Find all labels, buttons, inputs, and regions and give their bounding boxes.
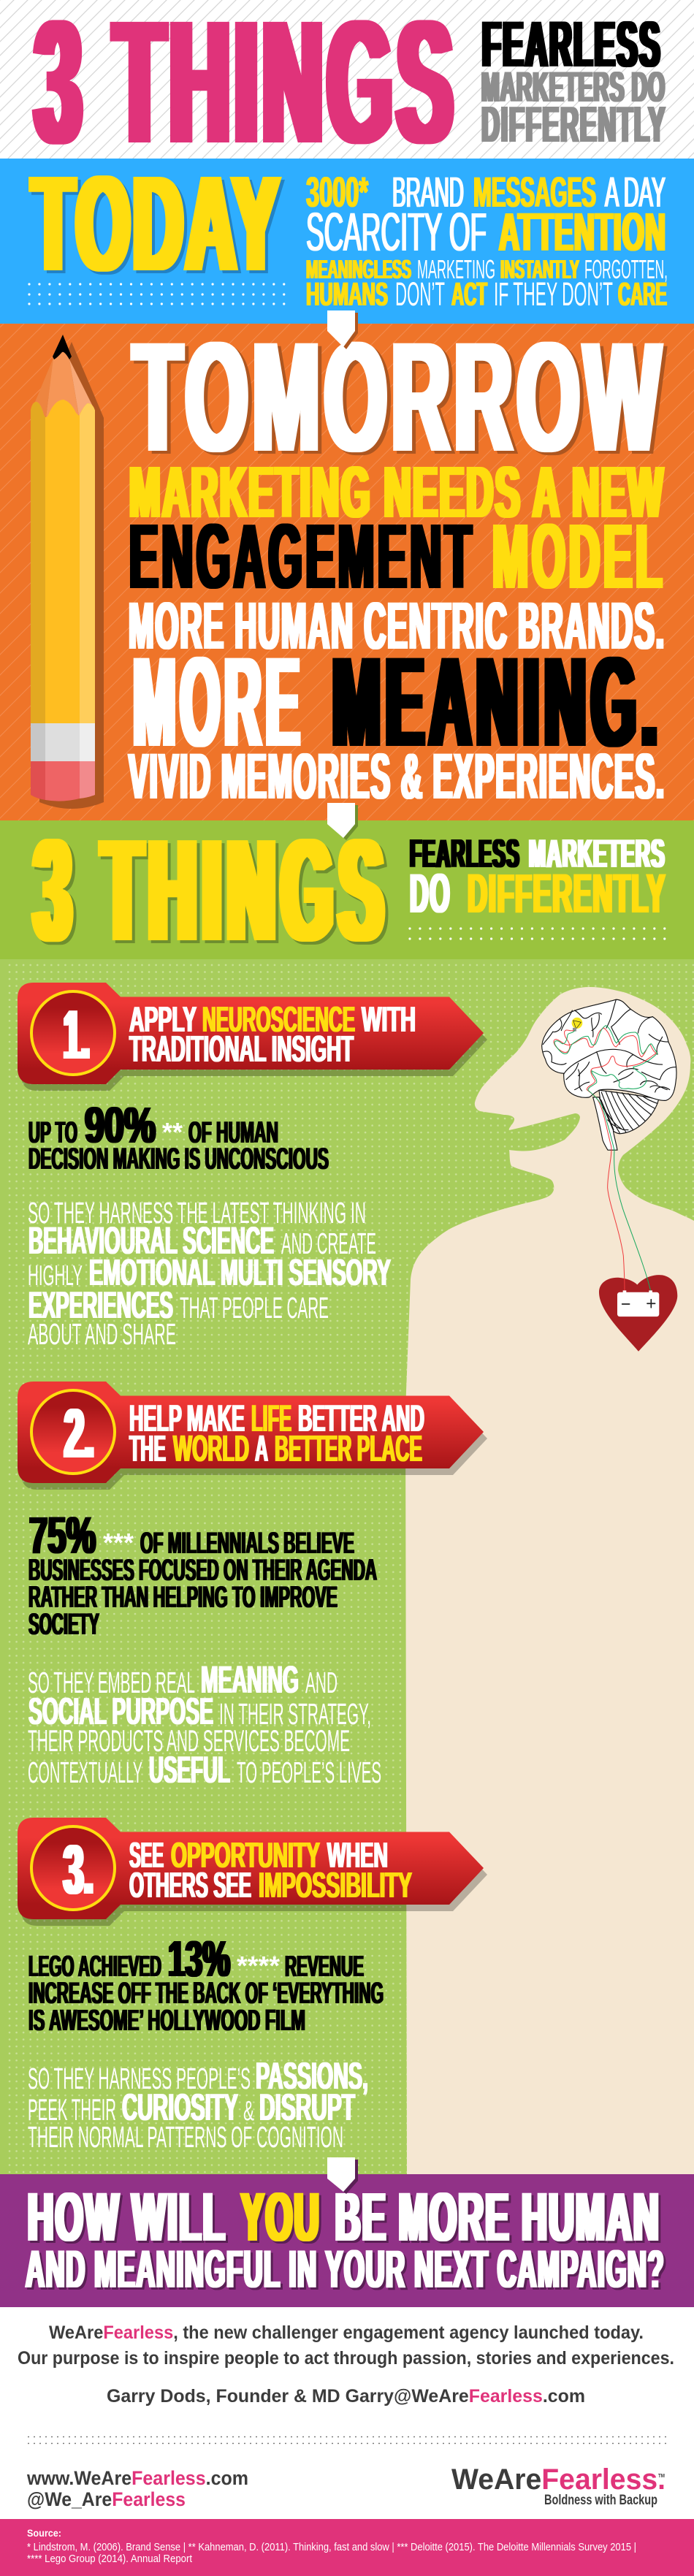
stat: 13 percent: REVENUE — [285, 1949, 364, 1983]
panel: today — [0, 148, 694, 324]
wire: red — [554, 1028, 656, 1291]
stat: 90 percent: 90% — [85, 1097, 156, 1154]
icon: light bulb — [572, 1018, 582, 1032]
panel: body background — [0, 959, 694, 2174]
stat: 13 percent: INCREASE OFF THE BACK OF ‘EVERYTHING — [28, 1975, 384, 2010]
text: scarcity of attention: SCARCITY OF — [306, 202, 487, 262]
text: behavioural science: EMOTIONAL MULTI SENSORY — [89, 1251, 391, 1293]
logo: Boldness with Backup — [544, 2493, 657, 2508]
figure: human silhouette — [405, 987, 694, 2174]
text: passions curiosity disrupt: & — [243, 2096, 254, 2127]
text: behavioural science: EXPERIENCES — [28, 1284, 173, 1327]
stat: 75 percent: OF MILLENNIALS BELIEVE — [140, 1525, 354, 1560]
icon: pencil — [31, 335, 104, 809]
stat: 75 percent: SOCIETY — [28, 1607, 99, 1641]
ribbon 1: APPLY — [129, 1000, 197, 1040]
text: meaningless marketing — [306, 254, 668, 284]
logo: TM — [658, 2474, 665, 2479]
ribbon 2: BETTER PLACE — [275, 1428, 422, 1469]
text: meaningless marketing: MEANINGLESS — [306, 254, 411, 284]
panel: three things banner — [0, 809, 694, 972]
ribbon 3: SEE — [129, 1836, 164, 1875]
text: behavioural science: AND CREATE — [281, 1227, 376, 1260]
text: behavioural science: HIGHLY — [28, 1260, 83, 1292]
panel: step 1 — [18, 983, 487, 1351]
text: meaningless marketing: INSTANTLY — [500, 254, 579, 284]
ribbon 3: IMPOSSIBILITY — [259, 1866, 412, 1905]
text: agency intro: WeAreFearless, the new challenger engagement agency launched today. — [49, 2322, 644, 2343]
ribbon 1: TRADITIONAL INSIGHT — [129, 1028, 354, 1070]
heading: how will you — [28, 2179, 660, 2256]
text: meaningless marketing: MARKETING — [417, 254, 495, 284]
text: source heading: Source: — [27, 2527, 61, 2539]
text: humans don't act: DON’T — [395, 275, 445, 313]
text: social purpose: SOCIAL PURPOSE — [28, 1691, 213, 1733]
ribbon 2: THE — [129, 1428, 166, 1469]
text: website: www.WeAreFearless.com — [26, 2467, 248, 2489]
ribbon 2: WORLD — [173, 1428, 249, 1469]
ribbon 2: HELP MAKE — [129, 1398, 245, 1440]
text: brand messages: 3000* — [306, 169, 368, 216]
text: social purpose: AND — [305, 1666, 338, 1699]
heading: how will you: YOU — [241, 2179, 321, 2256]
ribbon 2: BETTER AND — [298, 1398, 424, 1440]
text: social purpose: IN THEIR STRATEGY, — [219, 1697, 371, 1731]
stat: 75 percent: BUSINESSES FOCUSED ON THEIR AGENDA — [28, 1552, 377, 1587]
heading: how will you: HOW WILL — [28, 2179, 226, 2256]
text: passions curiosity disrupt: THEIR NORMAL PATTERNS OF COGNITION — [28, 2120, 343, 2154]
stat: 90 percent: DECISION MAKING IS UNCONSCIOUS — [28, 1141, 329, 1175]
stat: 13 percent — [28, 1930, 384, 2037]
text: social purpose: TO PEOPLE’S LIVES — [237, 1756, 381, 1789]
panel: call to action — [0, 2174, 694, 2307]
ribbon 1: 1. — [64, 996, 90, 1074]
text: social purpose: SO THEY EMBED REAL — [28, 1666, 195, 1699]
text: behavioural science — [28, 1196, 391, 1351]
panel: header — [0, 0, 694, 180]
ribbon 3: OTHERS SEE — [129, 1866, 251, 1905]
logo: WeAreFearless. — [451, 2463, 666, 2496]
stat: 75 percent: 75% — [29, 1507, 96, 1565]
stat: 75 percent: RATHER THAN HELPING TO IMPROVE — [28, 1579, 338, 1614]
ribbon 3: OPPORTUNITY — [171, 1836, 320, 1875]
ribbon 2: LIFE — [251, 1398, 291, 1440]
panel: step 2 — [18, 1382, 487, 1791]
ribbon 2: 2. — [64, 1395, 94, 1473]
text: passions curiosity disrupt: CURIOSITY — [122, 2087, 238, 2129]
text: brand messages — [306, 169, 666, 216]
illustration: brain wired to a heart battery — [542, 999, 677, 1352]
text: social purpose: USEFUL — [149, 1749, 230, 1791]
text: social purpose: THEIR PRODUCTS AND SERVICES BECOME — [28, 1723, 350, 1758]
arrow: today to tomorrow — [327, 310, 358, 349]
text: references line 2: **** Lego Group (2014). Annual Report — [27, 2553, 193, 2565]
panel: three things banner: DO — [410, 863, 451, 925]
ribbon 2: A — [255, 1428, 268, 1469]
icon: heart — [599, 1275, 677, 1352]
text: humans don't act — [306, 275, 667, 313]
ribbon 2 — [18, 1382, 487, 1490]
stat: 90 percent: ** — [162, 1117, 183, 1147]
text: social purpose: CONTEXTUALLY — [28, 1756, 142, 1789]
ribbon 3 — [18, 1818, 487, 1926]
text: passions curiosity disrupt: DISRUPT — [259, 2087, 355, 2129]
ribbon 1: WITH — [362, 1000, 416, 1040]
text: brand messages: BRAND — [392, 169, 464, 216]
text: humans don't act: ACT — [451, 275, 487, 313]
panel: step 3 — [18, 1818, 487, 2154]
text: social purpose — [28, 1658, 381, 1791]
text: passions curiosity disrupt: PASSIONS, — [256, 2055, 368, 2097]
stat: 13 percent: IS AWESOME’ HOLLYWOOD FILM — [28, 2003, 305, 2037]
stat: 13 percent: LEGO ACHIEVED — [28, 1949, 161, 1983]
stat: 75 percent — [28, 1507, 377, 1641]
text: behavioural science: THAT PEOPLE CARE — [180, 1291, 329, 1325]
text: passions curiosity disrupt: PEEK THEIR — [28, 2092, 116, 2127]
arrow: step 3 to call to action — [327, 2157, 358, 2194]
stat: 13 percent: 13% — [168, 1930, 230, 1987]
ribbon 3: 3. — [64, 1831, 94, 1909]
text: founder: Garry Dods, Founder & MD Garry@WeAreFearless.com — [107, 2386, 585, 2407]
icon: brain — [542, 999, 676, 1150]
ribbon 3: WHEN — [327, 1836, 388, 1875]
stat: 90 percent: UP TO — [28, 1115, 77, 1149]
panel: three things banner: FEARLESS — [410, 831, 520, 876]
stat: 13 percent: **** — [237, 1951, 280, 1981]
ribbon 1: NEUROSCIENCE — [202, 1000, 355, 1040]
text: behavioural science: ABOUT AND SHARE — [28, 1317, 176, 1351]
stat: 90 percent: OF HUMAN — [188, 1115, 278, 1149]
text: twitter handle: @We_AreFearless — [27, 2488, 186, 2510]
text: passions curiosity disrupt: SO THEY HARNESS PEOPLE’S — [28, 2062, 251, 2095]
panel: about — [0, 2307, 694, 2519]
stat: 75 percent: *** — [103, 1528, 134, 1558]
panel: tomorrow — [0, 310, 694, 820]
text: behavioural science: BEHAVIOURAL SCIENCE — [28, 1219, 274, 1262]
text: social purpose: MEANING — [201, 1658, 299, 1702]
wire: green — [554, 1026, 657, 1291]
text: passions curiosity disrupt — [28, 2055, 368, 2154]
panel: tomorrow: MORE — [133, 631, 304, 774]
text: humans don't act: HUMANS — [306, 275, 388, 313]
text: behavioural science: SO THEY HARNESS THE LATEST THINKING IN — [28, 1196, 366, 1230]
icon: battery — [617, 1290, 659, 1316]
ribbon 1 — [18, 983, 487, 1091]
heading: today: TODAY — [32, 148, 282, 300]
panel: sources — [0, 2519, 694, 2576]
arrow: tomorrow to three things — [327, 803, 358, 840]
stat: 90 percent — [28, 1097, 329, 1175]
